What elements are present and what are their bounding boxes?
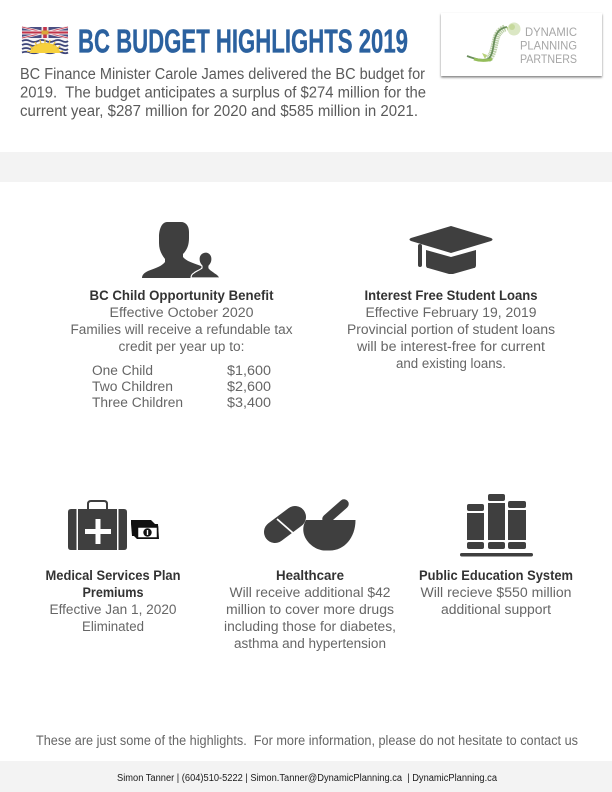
body text: additional support bbox=[441, 602, 551, 617]
panel: Medical Services Plan Premiums bbox=[46, 501, 180, 634]
logo: Dynamic Planning Partners: PLANNING bbox=[520, 40, 577, 52]
heading: Public Education System bbox=[419, 568, 573, 583]
icon: medical briefcase bbox=[68, 501, 127, 550]
body text: Effective October 2020 bbox=[110, 305, 254, 320]
intro text: current year, $287 million for 2020 and $585 million in 2021. bbox=[20, 103, 418, 120]
panel: Healthcare bbox=[224, 504, 396, 651]
body text: million to cover more drugs bbox=[226, 602, 394, 617]
heading: Interest Free Student Loans bbox=[364, 288, 538, 303]
icon: BC flag bbox=[22, 27, 68, 53]
heading: Healthcare bbox=[276, 568, 344, 583]
footer band with contact details: Simon Tanner | (604)510-5222 | Simon.Tanner@DynamicPlanning.ca | DynamicPlanning.ca bbox=[117, 773, 497, 784]
logo: Dynamic Planning Partners bbox=[441, 13, 602, 76]
heading: Premiums bbox=[82, 585, 144, 600]
body text: and existing loans. bbox=[396, 356, 506, 371]
icon: money bills bbox=[131, 520, 159, 539]
body text: credit per year up to: bbox=[118, 339, 244, 354]
table: credit amounts bbox=[92, 363, 271, 410]
heading: BC Child Opportunity Benefit bbox=[90, 288, 274, 303]
body text: asthma and hypertension bbox=[234, 636, 386, 651]
panel: Interest Free Student Loans bbox=[347, 226, 555, 371]
body text: Provincial portion of student loans bbox=[347, 322, 555, 337]
body text: Eliminated bbox=[82, 619, 144, 634]
body text: Will recieve $550 million bbox=[420, 585, 572, 600]
table: credit amounts: One Child bbox=[92, 363, 153, 378]
table: credit amounts: $3,400 bbox=[227, 395, 271, 410]
table: credit amounts: Three Children bbox=[92, 395, 183, 410]
intro text bbox=[20, 66, 426, 120]
intro text: BC Finance Minister Carole James delivered the BC budget for bbox=[20, 66, 425, 83]
icon: graduation cap bbox=[410, 226, 492, 274]
body text: including those for diabetes, bbox=[224, 619, 396, 634]
body text: Families will receive a refundable tax bbox=[70, 322, 293, 337]
body text bbox=[70, 305, 293, 354]
icon: adult and child silhouette bbox=[142, 222, 220, 278]
panel: Public Education System bbox=[419, 494, 573, 617]
band: grey divider bbox=[0, 152, 612, 182]
body text: Effective Jan 1, 2020 bbox=[50, 602, 176, 617]
body text bbox=[224, 585, 396, 651]
logo: Dynamic Planning Partners: DYNAMIC bbox=[525, 27, 577, 39]
title: BC BUDGET HIGHLIGHTS 2019 bbox=[78, 24, 408, 60]
body text bbox=[50, 602, 176, 634]
closing note: These are just some of the highlights. For more information, please do not hesitate to contact us bbox=[36, 733, 578, 748]
heading: Medical Services Plan bbox=[46, 568, 180, 583]
table: credit amounts: Two Children bbox=[92, 379, 173, 394]
intro text: 2019. The budget anticipates a surplus of $274 million for the bbox=[20, 84, 426, 102]
logo: Dynamic Planning Partners: PARTNERS bbox=[520, 54, 577, 66]
icon: pill and mortar and pestle bbox=[275, 504, 356, 550]
table: credit amounts: $2,600 bbox=[227, 379, 271, 394]
heading bbox=[46, 568, 180, 600]
body text bbox=[347, 305, 555, 371]
body text: will be interest-free for current bbox=[356, 339, 545, 354]
icon: books on a shelf bbox=[460, 494, 533, 556]
body text: Will receive additional $42 bbox=[230, 585, 390, 600]
body text: Effective February 19, 2019 bbox=[366, 305, 536, 320]
footer band with contact details bbox=[0, 761, 612, 792]
panel: BC Child Opportunity Benefit bbox=[70, 222, 293, 410]
body text bbox=[420, 585, 572, 617]
table: credit amounts: $1,600 bbox=[227, 363, 271, 378]
